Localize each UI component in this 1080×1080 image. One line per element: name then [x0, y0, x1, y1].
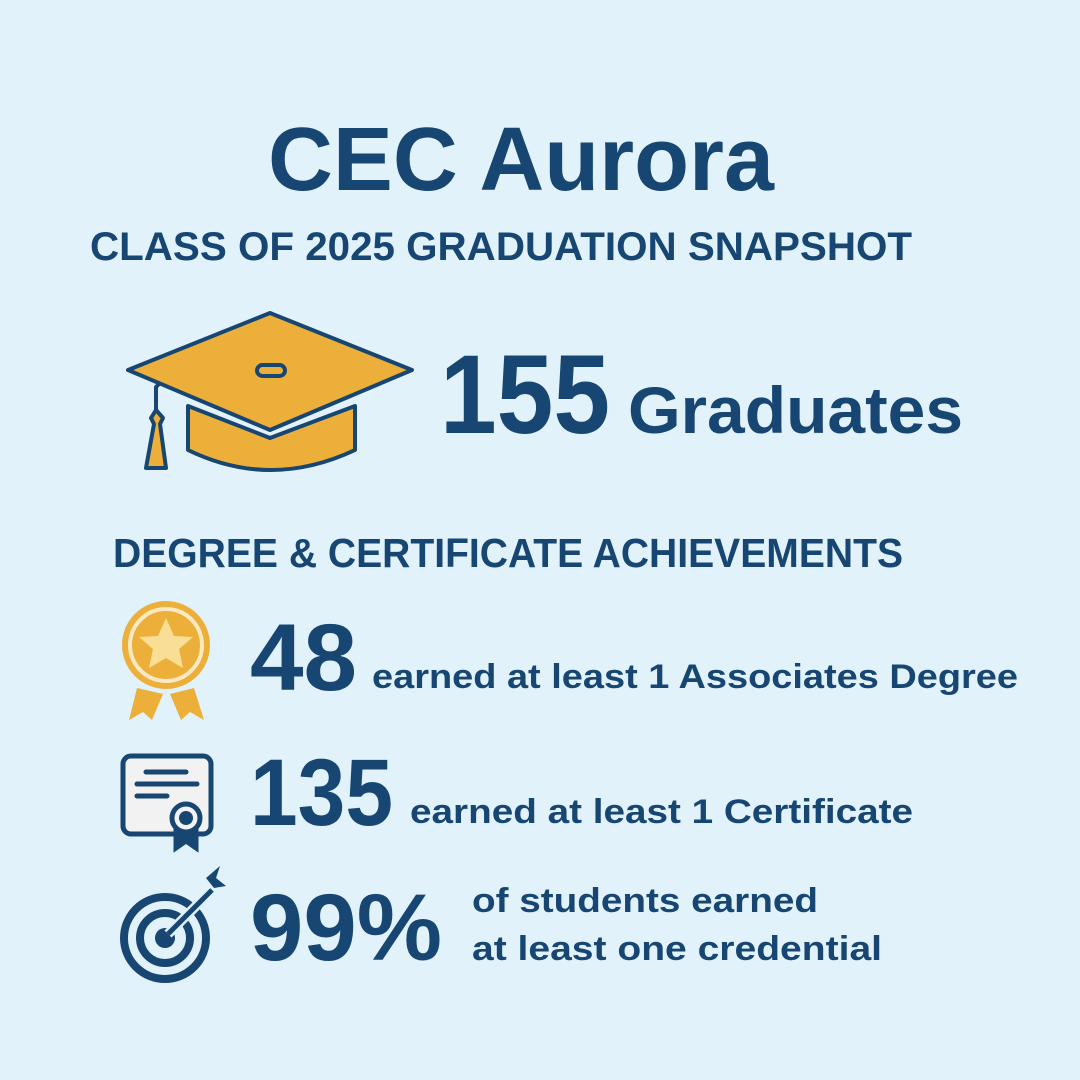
stat: 135 [250, 740, 913, 846]
stat: 99%: 99% [250, 875, 442, 981]
icon: target [124, 866, 226, 979]
stat: 135: earned at least 1 Certificate [410, 793, 913, 831]
icon: graduation cap [128, 313, 412, 470]
stat: 99% [250, 875, 882, 981]
subtitle: CLASS OF 2025 GRADUATION SNAPSHOT [90, 225, 912, 269]
title: CEC Aurora [268, 110, 775, 210]
icon: certificate [123, 756, 211, 848]
stat: 99%: at least one credential [472, 930, 882, 968]
stat: 48 [250, 605, 1018, 711]
stat: 48: earned at least 1 Associates Degree [372, 658, 1018, 696]
stat: 99%: of students earned [472, 882, 818, 920]
stat: 48: 48 [250, 605, 357, 711]
section heading: DEGREE & CERTIFICATE ACHIEVEMENTS [113, 530, 903, 576]
stat: 155 graduates: Graduates [628, 373, 963, 447]
icon: medal [120, 599, 212, 720]
stat: 155 graduates: 155 [440, 332, 610, 457]
stat: 155 graduates [440, 332, 963, 457]
stat: 135: 135 [250, 740, 393, 846]
